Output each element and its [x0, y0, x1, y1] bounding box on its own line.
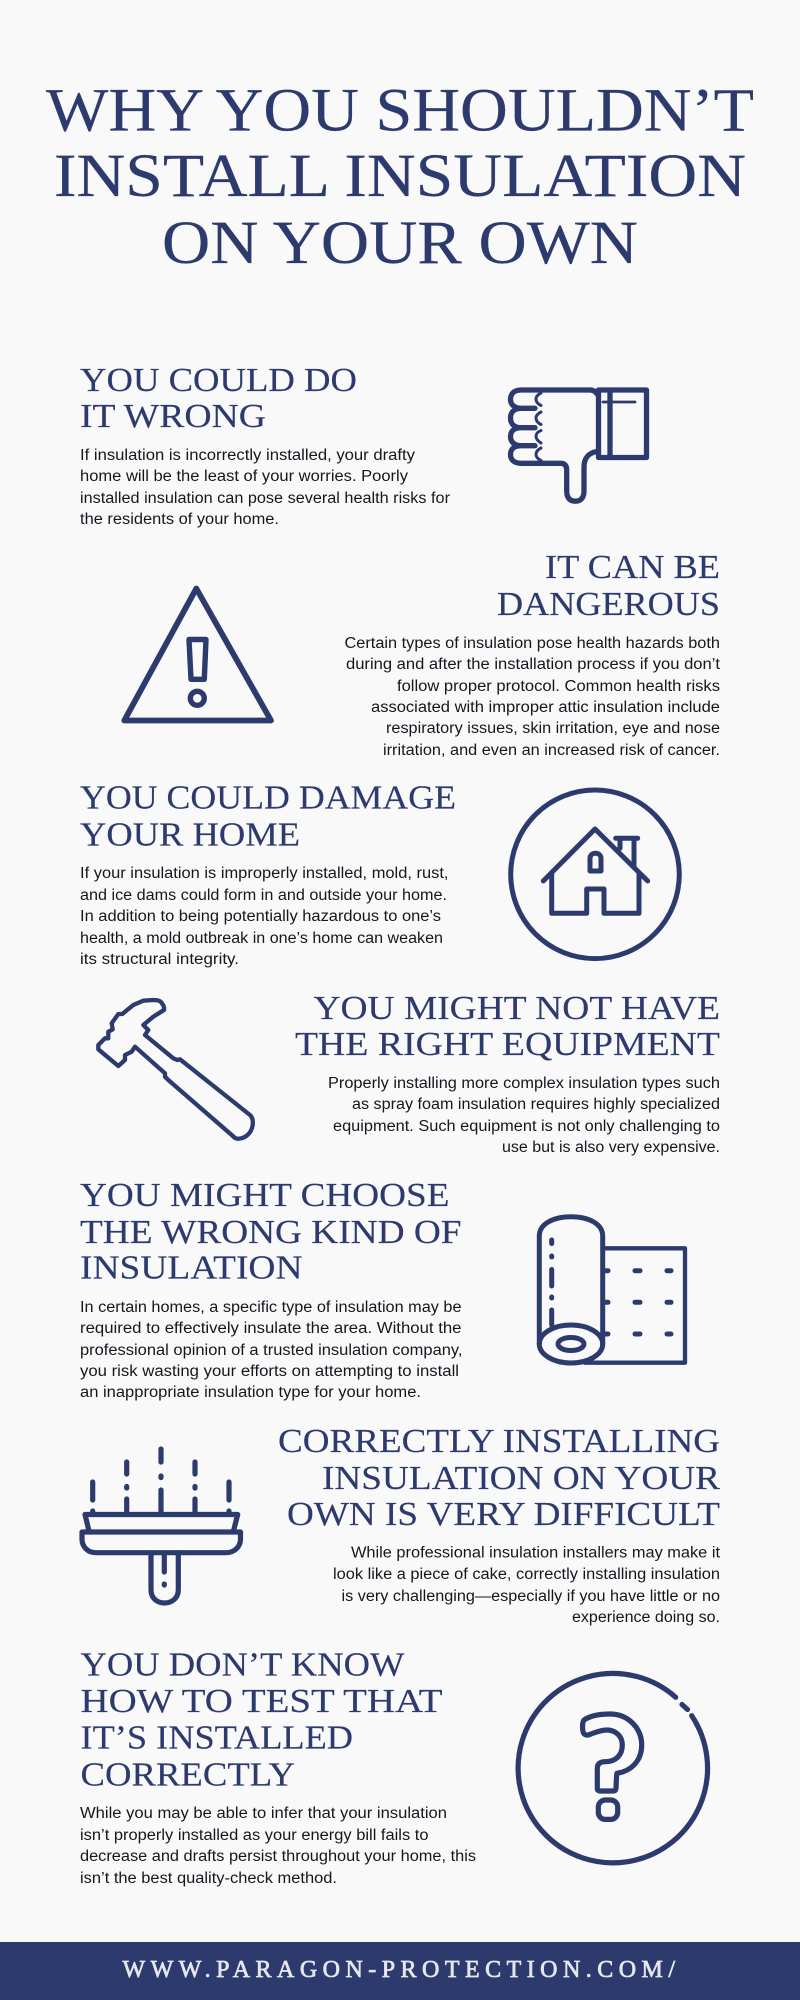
heading: right equipment [295, 990, 720, 1063]
heading: how to test: HOW TO TEST THAT [80, 1683, 443, 1720]
text block: it can be dangerous [344, 635, 721, 759]
text block: you could do it wrong: If insulation is incorrectly installed, your drafty [80, 447, 415, 464]
heading: it can be dangerous: DANGEROUS [497, 586, 720, 623]
heading: you could damage your home: YOU COULD DAMAGE [80, 780, 456, 816]
text block: wrong kind of insulation: required to effectively insulate the area. Without the [80, 1320, 462, 1337]
text block: you could do it wrong: the residents of your home. [80, 511, 279, 528]
footer band [0, 1942, 800, 2000]
panel: very difficult [82, 1423, 721, 1626]
text block: wrong kind of insulation: an inappropriate insulation type for your home. [80, 1384, 421, 1401]
heading: very difficult [278, 1423, 720, 1533]
heading: it can be dangerous [497, 549, 720, 623]
title: ON YOUR OWN [162, 210, 638, 277]
text block: how to test: isn’t the best quality-check method. [80, 1870, 337, 1887]
panel: how to test [80, 1646, 708, 1887]
footer url: WWW.PARAGON-PROTECTION.COM/ [122, 1957, 675, 1983]
text block: you could damage your home: If your insulation is improperly installed, mold, rust, [80, 865, 448, 882]
heading: wrong kind of insulation [80, 1177, 462, 1286]
panel: you could damage your home [80, 780, 679, 968]
heading: right equipment: YOU MIGHT NOT HAVE [314, 990, 720, 1027]
icon: warning triangle [124, 588, 271, 720]
text block: very difficult: While professional insulation installers may make it [351, 1544, 721, 1562]
heading: you could do it wrong: YOU COULD DO [80, 362, 357, 399]
text block: it can be dangerous: follow proper protocol. Common health risks [397, 678, 720, 695]
icon: squeegee [82, 1449, 240, 1603]
panel: you could do it wrong [80, 362, 646, 528]
text block: it can be dangerous: respiratory issues, skin irritation, eye and nose [386, 720, 720, 737]
text block: you could damage your home: In addition to being potentially hazardous to one’s [80, 908, 441, 925]
text block: how to test [80, 1805, 476, 1887]
title: WHY YOU SHOULDN’T [46, 78, 754, 144]
text block: right equipment: Properly installing more complex insulation types such [328, 1075, 720, 1092]
heading: how to test: IT’S INSTALLED [80, 1720, 353, 1756]
heading: you could do it wrong [80, 362, 357, 435]
text block: you could damage your home [80, 865, 448, 968]
text block: very difficult: experience doing so. [572, 1609, 720, 1626]
text block: wrong kind of insulation: In certain homes, a specific type of insulation may be [80, 1299, 462, 1316]
heading: you could damage your home: YOUR HOME [80, 816, 300, 854]
text block: it can be dangerous: irritation, and even an increased risk of cancer. [383, 742, 720, 759]
panel: it can be dangerous [124, 549, 721, 759]
text block: it can be dangerous: associated with improper attic insulation include [371, 699, 720, 716]
text block: wrong kind of insulation: professional opinion of a trusted insulation company, [80, 1342, 462, 1359]
heading: how to test: YOU DON’T KNOW [80, 1646, 405, 1684]
heading: right equipment: THE RIGHT EQUIPMENT [295, 1026, 720, 1063]
text block: you could do it wrong [80, 447, 450, 528]
text block: right equipment [328, 1075, 720, 1156]
text block: you could damage your home: health, a mold outbreak in one’s home can weaken [80, 930, 443, 947]
text block: wrong kind of insulation: you risk wasting your efforts on attempting to install [80, 1363, 459, 1380]
icon: insulation roll [539, 1217, 685, 1363]
panel: you might not have the right equipment [98, 990, 720, 1156]
heading: how to test [80, 1646, 443, 1794]
text block: right equipment: as spray foam insulation requires highly specialized [352, 1096, 720, 1113]
text block: very difficult [333, 1544, 721, 1626]
text block: very difficult: is very challenging—especially if you have little or no [342, 1588, 720, 1605]
text block: right equipment: use but is also very expensive. [502, 1139, 720, 1156]
icon: hammer [98, 1000, 253, 1139]
panel: wrong kind of insulation [80, 1177, 685, 1401]
text block: very difficult: look like a piece of cake, correctly installing insulation [333, 1566, 720, 1583]
text block: you could damage your home: its structural integrity. [80, 951, 239, 968]
heading: wrong kind of insulation: INSULATION [80, 1250, 302, 1286]
heading: very difficult: INSULATION ON YOUR [322, 1460, 720, 1497]
icon: thumbs down [510, 390, 646, 501]
title [46, 78, 754, 277]
icon: question mark in circle [518, 1673, 708, 1863]
text block: you could damage your home: and ice dams could form in and outside your home. [80, 887, 447, 904]
heading: how to test: CORRECTLY [80, 1756, 295, 1794]
text block: you could do it wrong: home will be the least of your worries. Poorly [80, 468, 408, 485]
text block: you could do it wrong: installed insulation can pose several health risks for [80, 490, 450, 507]
heading: you could do it wrong: IT WRONG [80, 398, 266, 435]
text block: how to test: While you may be able to infer that your insulation [80, 1805, 447, 1822]
title: INSTALL INSULATION [54, 143, 746, 210]
heading: it can be dangerous: IT CAN BE [545, 549, 720, 586]
heading: you could damage your home [80, 780, 456, 854]
text block: it can be dangerous: during and after the installation process if you don’t [346, 656, 721, 673]
heading: wrong kind of insulation: THE WRONG KIND OF [80, 1214, 462, 1251]
text block: how to test: isn’t properly installed as your energy bill fails to [80, 1827, 428, 1844]
text block: wrong kind of insulation [80, 1299, 462, 1401]
heading: very difficult: CORRECTLY INSTALLING [278, 1423, 720, 1460]
heading: wrong kind of insulation: YOU MIGHT CHOOSE [80, 1177, 450, 1214]
text block: it can be dangerous: Certain types of insulation pose health hazards both [344, 635, 720, 652]
text block: how to test: decrease and drafts persist throughout your home, this [80, 1848, 476, 1865]
heading: very difficult: OWN IS VERY DIFFICULT [287, 1496, 720, 1533]
text block: right equipment: equipment. Such equipment is not only challenging to [333, 1118, 720, 1135]
icon: house in circle [511, 790, 679, 959]
